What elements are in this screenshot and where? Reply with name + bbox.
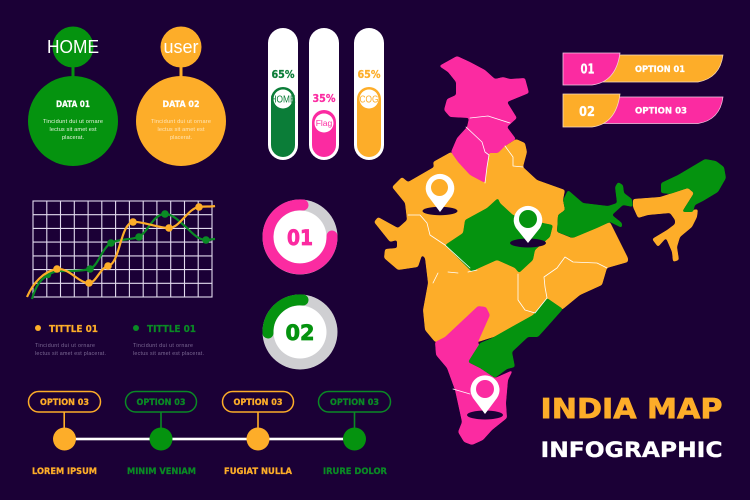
timeline step: minim veniam: OPTION 03 <box>136 398 186 408</box>
text block: data 02: placerat. <box>170 135 192 141</box>
legend: orange title <box>35 324 106 357</box>
chart: donut 02: 02 <box>286 321 314 345</box>
orange data line <box>27 203 215 297</box>
banner: option 01 <box>563 53 723 85</box>
banner: option 01: 01 <box>580 62 594 78</box>
text block: data 01: placerat. <box>62 135 84 141</box>
region: green south-east <box>468 298 563 378</box>
chart: donut 01 <box>262 200 338 274</box>
region: pink south <box>435 306 513 445</box>
banner: option 03 <box>563 94 723 127</box>
timeline step: fugiat nulla <box>222 392 294 477</box>
timeline step: lorem ipsum: OPTION 03 <box>40 398 89 408</box>
title: INFOGRAPHIC <box>540 438 722 462</box>
icon: map pin central <box>510 206 546 248</box>
panel: data 02 circle <box>136 26 226 166</box>
legend: orange title: TITTLE 01 <box>49 324 98 335</box>
chart: line chart <box>27 201 215 299</box>
title: INDIA MAP <box>540 393 722 425</box>
timeline step: lorem ipsum <box>28 392 100 477</box>
timeline step: minim veniam <box>126 392 196 477</box>
region: orange mainland <box>374 139 628 342</box>
heading: data 02: DATA 02 <box>162 100 200 110</box>
banner: option 01: OPTION 01 <box>635 65 685 75</box>
title <box>540 393 722 462</box>
text block: data 01: Tincidunt dui ut ornare <box>43 119 103 125</box>
panel: progress bar home 65% <box>268 28 298 160</box>
timeline step: lorem ipsum: LOREM IPSUM <box>32 467 97 477</box>
legend: orange title: Tincidunt dui ut ornare <box>35 343 95 349</box>
legend: green title <box>133 324 204 357</box>
timeline step: fugiat nulla: OPTION 03 <box>234 398 283 408</box>
region: green east <box>557 182 633 238</box>
timeline step: fugiat nulla: FUGIAT NULLA <box>224 467 292 477</box>
panel: progress bar home 65%: 65% <box>272 69 295 81</box>
timeline step: irure dolor: IRURE DOLOR <box>323 467 387 477</box>
legend: green title: Tincidunt dui ut ornare <box>133 343 193 349</box>
panel: timeline <box>28 392 390 477</box>
icon: map pin south <box>467 375 503 420</box>
legend: green title: lectus sit amet est placerat. <box>133 351 204 357</box>
text block: data 02: Tincidunt dui ut ornare <box>151 119 211 125</box>
text block: data 01: lectus sit amet est <box>50 127 97 133</box>
panel: progress bar cog 65%: 65% <box>358 69 381 81</box>
region: green central <box>445 198 553 273</box>
region: pink north <box>439 56 529 183</box>
text block: data 02 <box>151 119 211 141</box>
icon label: user: user <box>164 37 199 57</box>
panel: progress bar flag 35% <box>309 28 339 160</box>
timeline step: minim veniam: MINIM VENIAM <box>127 467 196 477</box>
region: orange north-east <box>633 188 698 262</box>
text block: data 01 <box>43 119 103 141</box>
panel: progress bar home 65%: HOME <box>270 94 296 106</box>
panel: data 01 circle <box>28 26 118 166</box>
green data line <box>32 210 215 299</box>
legend: green title: TITTLE 01 <box>147 324 196 335</box>
chart: donut 01: 01 <box>287 226 313 250</box>
heading: data 01: DATA 01 <box>56 100 90 110</box>
icon: map pin west <box>422 174 458 215</box>
banner: option 03: OPTION 03 <box>635 106 687 116</box>
timeline step: irure dolor: OPTION 03 <box>330 398 379 408</box>
panel: progress bar cog 65%: COG <box>360 94 379 106</box>
panel: progress bar cog 65% <box>354 28 384 160</box>
banner: option 03: 02 <box>579 105 595 120</box>
timeline step: irure dolor <box>318 392 390 477</box>
map: India <box>374 56 726 445</box>
panel: progress bar flag 35%: Flag <box>316 118 333 128</box>
chart: donut 02 <box>262 294 338 370</box>
text block: data 02: lectus sit amet est <box>158 127 205 133</box>
legend: orange title: lectus sit amet est placerat. <box>35 351 106 357</box>
icon label: home: HOME <box>47 37 99 57</box>
panel: progress bar flag 35%: 35% <box>312 93 336 105</box>
region: green north-east <box>661 159 726 212</box>
